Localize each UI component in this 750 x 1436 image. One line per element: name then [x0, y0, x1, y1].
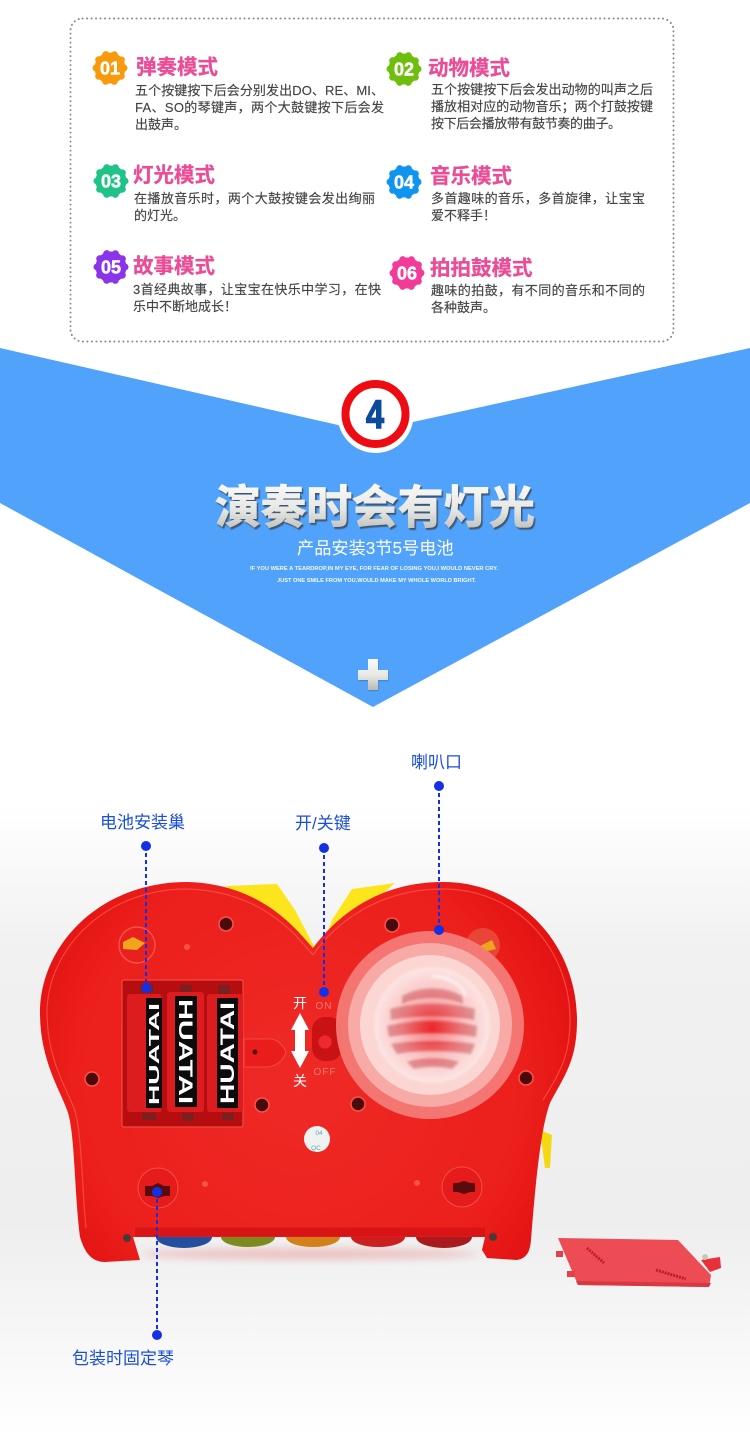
on/off arrow: 开: [293, 995, 307, 1011]
callout: battery bay: 电池安装巢: [100, 813, 185, 832]
mode 03: light mode: 在播放音乐时，两个大鼓按键会发出绚丽: [134, 191, 375, 206]
mounting holes: [85, 917, 533, 1242]
on/off switch: [312, 1001, 342, 1078]
battery 3: [207, 994, 243, 1112]
mode 01: play mode: 弹奏模式: [136, 55, 218, 79]
mode 04: music mode: [388, 164, 645, 223]
mode 02: animal mode: 动物模式: [428, 57, 510, 80]
mode 05: story mode: 3首经典故事，让宝宝在快乐中学习，在快: [133, 282, 381, 297]
callout: packaging fixing: 包装时固定琴: [72, 1349, 174, 1368]
english tagline: JUST ONE SMILE FROM YOU,WOULD MAKE MY WHOLE WORLD BRIGHT.: [277, 578, 476, 584]
mode 04: music mode: 爱不释手！: [431, 208, 496, 223]
icon: plus: [358, 659, 388, 690]
blue chevron banner: [0, 348, 750, 707]
red body: [40, 882, 577, 1262]
mode 06: clap drum mode: 拍拍鼓模式: [430, 257, 533, 280]
battery 2: [167, 992, 204, 1112]
callout: battery bay: [100, 813, 185, 993]
battery 1: [127, 994, 163, 1112]
piano keys: [156, 1226, 472, 1248]
mode 02: animal mode: 02: [394, 60, 414, 80]
mode 03: light mode: [96, 164, 375, 223]
mode 05: story mode: 05: [101, 258, 121, 278]
mode 01: play mode: FA、SO的琴键声，两个大鼓键按下后会发: [135, 100, 384, 115]
english tagline: IF YOU WERE A TEARDROP,IN MY EYE, FOR FEAR OF LOSING YOU,I WOULD NEVER CRY.: [250, 566, 498, 572]
callout: speaker: 喇叭口: [411, 753, 462, 772]
battery bay: [122, 980, 243, 1127]
mode 06: clap drum mode: 各种鼓声。: [431, 300, 496, 315]
on/off arrow: 关: [293, 1073, 307, 1089]
on/off arrow: [291, 995, 309, 1089]
on/off switch: OFF: [314, 1067, 336, 1078]
mode 06: clap drum mode: 趣味的拍鼓，有不同的音乐和不同的: [431, 283, 645, 298]
mode 02: animal mode: 播放相对应的动物音乐；两个打鼓按键: [431, 99, 653, 115]
mode 04: music mode: 多首趣味的音乐，多首旋律，让宝宝: [431, 191, 645, 206]
mode 05: story mode: [96, 252, 381, 314]
mode 02: animal mode: 按下后会播放带有鼓节奏的曲子。: [431, 116, 621, 131]
heading: 演奏时会有灯光: [215, 482, 535, 533]
battery cover: [556, 1238, 721, 1287]
battery 1: HUATAI: [146, 1003, 163, 1105]
speaker: [336, 931, 524, 1119]
mode 02: animal mode: [388, 54, 653, 131]
callout: packaging fixing: [72, 1187, 174, 1368]
yellow top behind: [225, 883, 552, 1168]
upper screw posts: [119, 927, 500, 963]
mode 02: animal mode: 五个按键按下后会发出动物的叫声之后: [431, 82, 653, 97]
battery 3: HUATAI: [218, 1002, 239, 1104]
mode 04: music mode: 音乐模式: [430, 164, 512, 188]
callout: on/off key: 开/关键: [295, 814, 351, 833]
battery 2: HUATAI: [174, 999, 195, 1104]
QC sticker: [304, 1126, 330, 1152]
mode 03: light mode: 的灯光。: [134, 208, 186, 223]
mode 01: play mode: 出鼓声。: [135, 117, 187, 132]
badge: number 4: [338, 377, 414, 453]
on/off switch: ON: [316, 1001, 332, 1012]
red reflection: [140, 1248, 480, 1260]
mode 01: play mode: [94, 52, 384, 132]
subheading: 产品安装3节5号电池: [297, 538, 454, 558]
mode 03: light mode: 03: [101, 172, 121, 192]
mode 05: story mode: 故事模式: [133, 255, 215, 278]
panel: play modes: [70, 18, 674, 342]
callout: on/off key: [295, 814, 351, 997]
product: toy back: [40, 882, 577, 1262]
mode 03: light mode: 灯光模式: [133, 164, 215, 187]
mode 06: clap drum mode: [392, 257, 645, 315]
QC sticker: 04: [315, 1130, 323, 1137]
mode 04: music mode: 04: [394, 172, 414, 192]
QC sticker: QC: [311, 1145, 321, 1152]
badge: number 4: 4: [366, 393, 385, 437]
mode 01: play mode: 五个按键按下后会分别发出DO、RE、MI、: [135, 83, 384, 98]
mode 01: play mode: 01: [100, 58, 120, 78]
callout: speaker: [411, 753, 462, 935]
bay tab: [244, 1039, 286, 1067]
mode 06: clap drum mode: 06: [397, 264, 417, 284]
mode 05: story mode: 乐中不断地成长！: [133, 299, 237, 314]
lower screw posts: [138, 1167, 482, 1208]
english tagline: [250, 566, 498, 584]
